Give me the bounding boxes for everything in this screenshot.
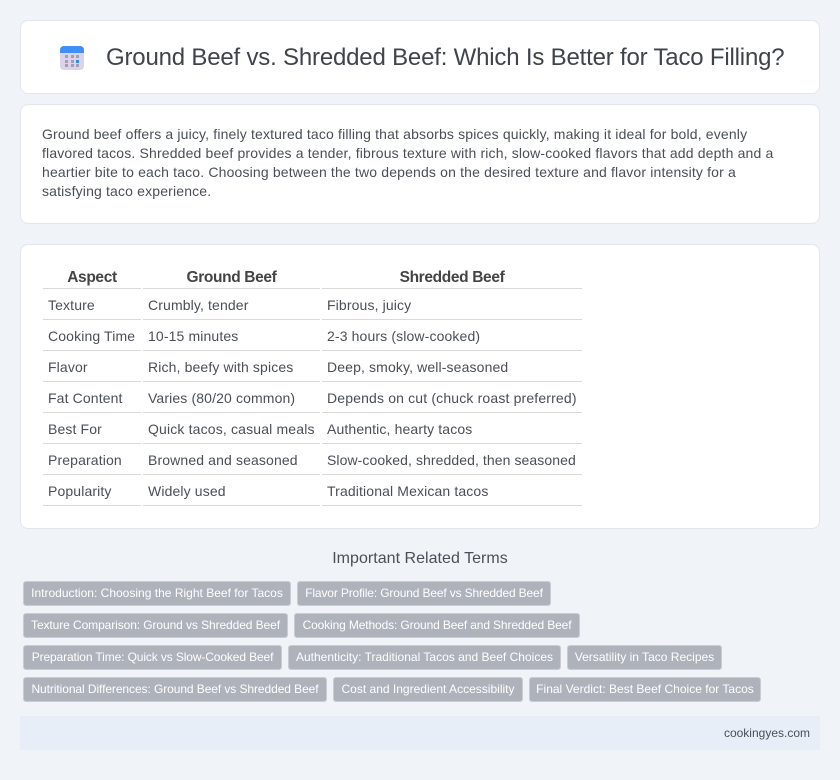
tag: Cooking Methods: Ground Beef and Shredded Beef	[303, 618, 571, 632]
tag: Nutritional Differences: Ground Beef vs Shredded Beef	[31, 682, 319, 696]
title: Ground Beef vs. Shredded Beef: Which Is Better for Taco Filling?	[106, 44, 784, 71]
row: best for: Authentic, hearty tacos	[327, 421, 472, 437]
row: cooking time: 10-15 minutes	[148, 328, 238, 344]
row: preparation: Slow-cooked, shredded, then seasoned	[327, 452, 576, 468]
table header row: Ground Beef	[186, 269, 276, 286]
row: texture: Crumbly, tender	[148, 297, 249, 313]
row: flavor	[48, 359, 508, 375]
tag	[333, 677, 523, 702]
row: fat content	[48, 390, 577, 406]
tag: Introduction: Choosing the Right Beef for Tacos	[31, 586, 283, 600]
intro paragraph	[42, 126, 774, 199]
row: cooking time	[48, 328, 480, 344]
tag: Final Verdict: Best Beef Choice for Tacos	[536, 682, 754, 696]
row: preparation	[48, 452, 576, 468]
tag: Authenticity: Traditional Tacos and Beef Choices	[296, 650, 553, 664]
tag: Cost and Ingredient Accessibility	[341, 682, 515, 696]
row: popularity	[48, 483, 488, 499]
row: flavor: Deep, smoky, well-seasoned	[327, 359, 508, 375]
tag: Versatility in Taco Recipes	[575, 650, 714, 664]
row: cooking time: 2-3 hours (slow-cooked)	[327, 328, 480, 344]
tag	[529, 677, 761, 702]
row: texture	[48, 297, 412, 313]
row: texture: Texture	[48, 297, 95, 313]
icon: calendar grid	[60, 46, 84, 70]
row: best for: Quick tacos, casual meals	[148, 421, 315, 437]
table header row: Aspect	[67, 269, 117, 286]
tag: Preparation Time: Quick vs Slow-Cooked Beef	[32, 650, 273, 664]
row: popularity: Popularity	[48, 483, 112, 499]
intro paragraph: heartier bite to each taco. Choosing between the two depends on the desired texture and flavor intensity for a	[42, 164, 736, 180]
tag	[294, 613, 580, 638]
row: popularity: Widely used	[148, 483, 226, 499]
tag	[567, 645, 722, 670]
tag	[23, 677, 327, 702]
tag	[288, 645, 561, 670]
row: fat content: Varies (80/20 common)	[148, 390, 295, 406]
row: cooking time: Cooking Time	[48, 328, 135, 344]
panel: introduction text	[20, 104, 820, 224]
tag	[23, 645, 282, 670]
tag: Texture Comparison: Ground vs Shredded Beef	[31, 618, 280, 632]
row: fat content: Depends on cut (chuck roast preferred)	[327, 390, 577, 406]
row: texture: Fibrous, juicy	[327, 297, 411, 313]
row: preparation: Preparation	[48, 452, 122, 468]
row: popularity: Traditional Mexican tacos	[327, 483, 488, 499]
row: best for: Best For	[48, 421, 102, 437]
row: fat content: Fat Content	[48, 390, 123, 406]
section heading: related terms: Important Related Terms	[332, 550, 508, 567]
tag	[297, 581, 551, 606]
panel: title header	[20, 20, 820, 94]
intro paragraph: Ground beef offers a juicy, finely textured taco filling that absorbs spices quickly, making it ideal for bold, evenly	[42, 126, 747, 142]
table header row: Shredded Beef	[400, 269, 504, 286]
tag: Flavor Profile: Ground Beef vs Shredded Beef	[305, 586, 543, 600]
intro paragraph: flavored tacos. Shredded beef provides a tender, fibrous texture with rich, slow-cooked flavors that add depth and a	[42, 145, 773, 161]
row: best for	[48, 421, 472, 437]
row: flavor: Rich, beefy with spices	[148, 359, 293, 375]
footer bar	[20, 716, 820, 750]
intro paragraph: satisfying taco experience.	[42, 183, 211, 199]
tag	[23, 613, 288, 638]
tag	[23, 581, 291, 606]
footer source text: cookingyes.com	[724, 726, 810, 740]
comparison table	[43, 269, 582, 506]
panel: comparison table	[20, 244, 820, 529]
table header row	[67, 269, 505, 286]
row: preparation: Browned and seasoned	[148, 452, 298, 468]
related term tags	[23, 581, 761, 702]
row: flavor: Flavor	[48, 359, 88, 375]
